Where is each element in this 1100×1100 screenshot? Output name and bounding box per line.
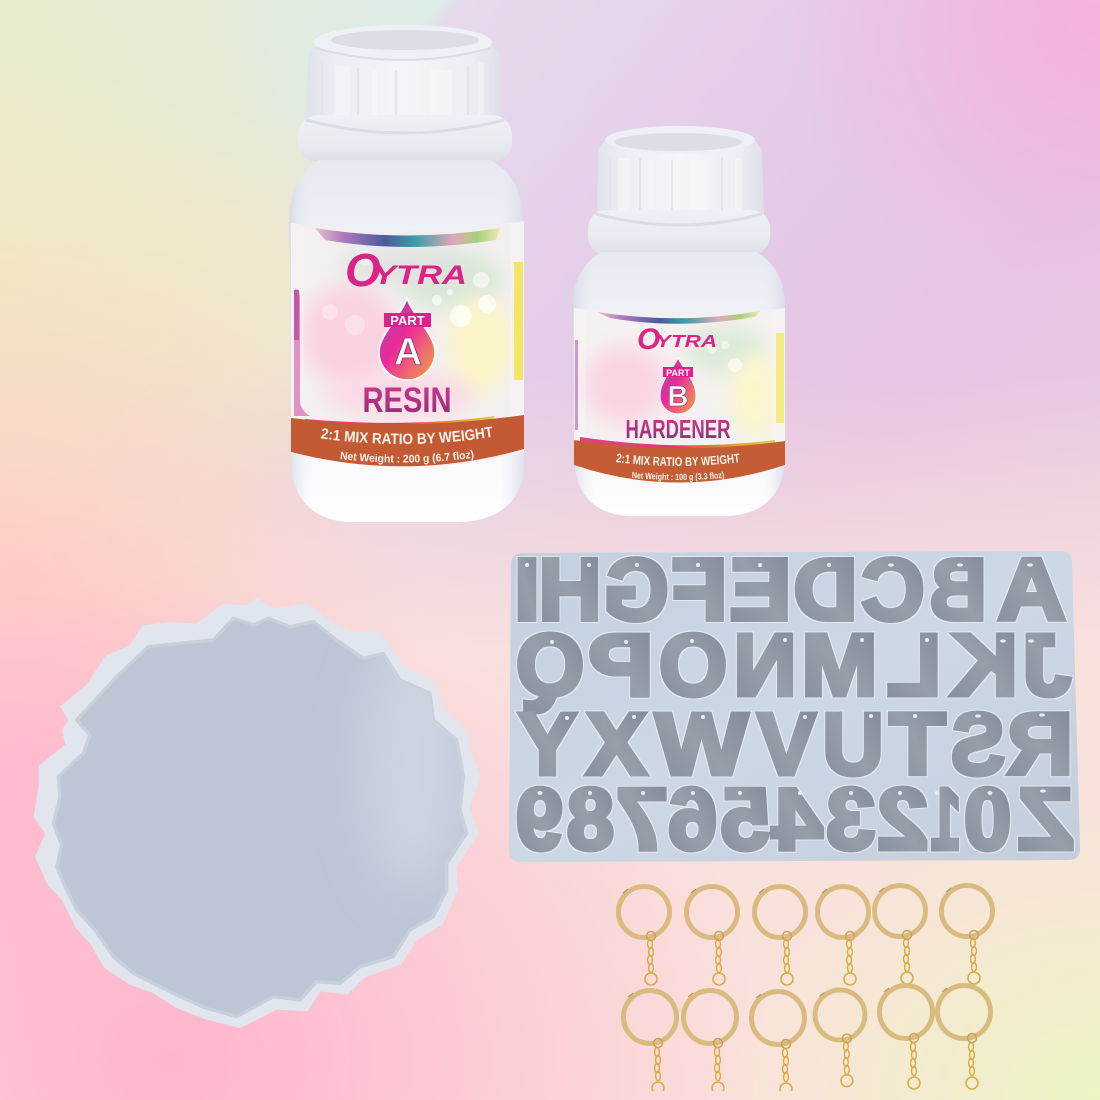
bottle B logo: YTRA xyxy=(656,331,717,351)
mirrored letters and digits: 2 xyxy=(877,771,928,868)
bottle B mix ratio text: 2:1 MIX RATIO BY WEIGHT xyxy=(616,454,740,466)
mirrored letters and digits: N xyxy=(734,617,796,714)
mirrored letters and digits: 9 xyxy=(516,771,563,868)
mirrored letters and digits: G xyxy=(604,542,668,638)
bottle B logo xyxy=(637,323,717,356)
keyrings xyxy=(618,886,992,1095)
mirrored letters and digits: 3 xyxy=(826,771,875,868)
mirrored letters and digits: P xyxy=(588,617,654,714)
mirrored letters and digits: O xyxy=(659,617,727,714)
mirrored letters and digits: K xyxy=(951,617,1018,714)
bottle A net weight text: Net Weight : 200 g (6.7 floz) xyxy=(340,450,474,464)
mirrored letters and digits: L xyxy=(887,617,941,714)
mirrored letters and digits: B xyxy=(930,542,986,638)
mirrored letters and digits: I xyxy=(514,542,540,638)
bottle B label xyxy=(574,308,785,482)
mold plate xyxy=(509,551,1080,862)
bottle B logo: O xyxy=(637,323,660,356)
bottle B part drop: PART xyxy=(666,368,690,378)
mirrored letters and digits: 1 xyxy=(931,771,961,868)
mirrored letters and digits: M xyxy=(802,617,878,714)
bottle B part drop: B xyxy=(668,381,688,413)
bottle: part A resin xyxy=(289,25,524,522)
coaster mold xyxy=(35,599,479,1027)
bottle A logo xyxy=(345,244,467,296)
mirrored letters and digits: Z xyxy=(1018,771,1074,868)
mirrored letters and digits: T xyxy=(890,696,946,793)
mirrored letters and digits: Y xyxy=(518,696,576,793)
bottle A part drop: PART xyxy=(390,313,425,328)
bottle A logo: O xyxy=(345,244,381,296)
coaster inner tray xyxy=(53,618,467,1017)
mirrored letters and digits: R xyxy=(1007,696,1073,793)
mirrored letters and digits: X xyxy=(587,696,646,793)
bottle B orange band xyxy=(574,440,785,484)
alphabet and number mold xyxy=(509,542,1080,868)
bottle A mix ratio text: 2:1 MIX RATIO BY WEIGHT xyxy=(320,426,492,444)
mirrored letters and digits: A xyxy=(998,542,1066,638)
mirrored letters and digits xyxy=(514,542,1074,868)
bottle B HARDENER text: HARDENER xyxy=(626,414,731,444)
bottle A body xyxy=(289,160,524,522)
mirrored letters and digits: U xyxy=(822,696,884,793)
bottle B part drop xyxy=(660,358,696,414)
bottle A orange band xyxy=(291,415,524,466)
mirrored letters and digits: V xyxy=(758,696,816,793)
mirrored letters and digits: Q xyxy=(516,617,584,714)
bottle B body xyxy=(573,252,785,516)
bottle B net weight text: Net Weight : 100 g (3.3 floz) xyxy=(632,472,724,482)
mirrored letters and digits: W xyxy=(655,696,748,793)
mirrored letters and digits: 6 xyxy=(668,771,717,868)
keyring holes in letters xyxy=(525,563,1046,795)
bottle B cap xyxy=(588,126,770,255)
coaster rim xyxy=(35,599,479,1027)
mirrored letters and digits: E xyxy=(730,542,792,638)
bottle A logo: YTRA xyxy=(373,260,467,290)
mirrored letters and digits: S xyxy=(951,696,1005,793)
mirrored letters and digits: H xyxy=(538,542,602,638)
bottle A cap xyxy=(298,25,512,162)
mirrored letters and digits: 7 xyxy=(616,771,668,868)
bottle A RESIN text: RESIN xyxy=(362,381,452,420)
mirrored letters and digits: 8 xyxy=(567,771,614,868)
mirrored letters and digits: 5 xyxy=(721,771,770,868)
mirrored letters and digits: D xyxy=(794,542,858,638)
mirrored letters and digits: 0 xyxy=(964,771,1011,868)
bottle A label xyxy=(291,215,524,485)
bottle A part drop xyxy=(379,298,435,380)
bottle A part drop: A xyxy=(394,331,422,374)
bottle: part B hardener xyxy=(573,126,785,516)
mirrored letters and digits: J xyxy=(1022,617,1071,714)
mirrored letters and digits: F xyxy=(672,542,728,638)
mirrored letters and digits: 4 xyxy=(772,771,823,868)
mirrored letters and digits: C xyxy=(862,542,924,638)
